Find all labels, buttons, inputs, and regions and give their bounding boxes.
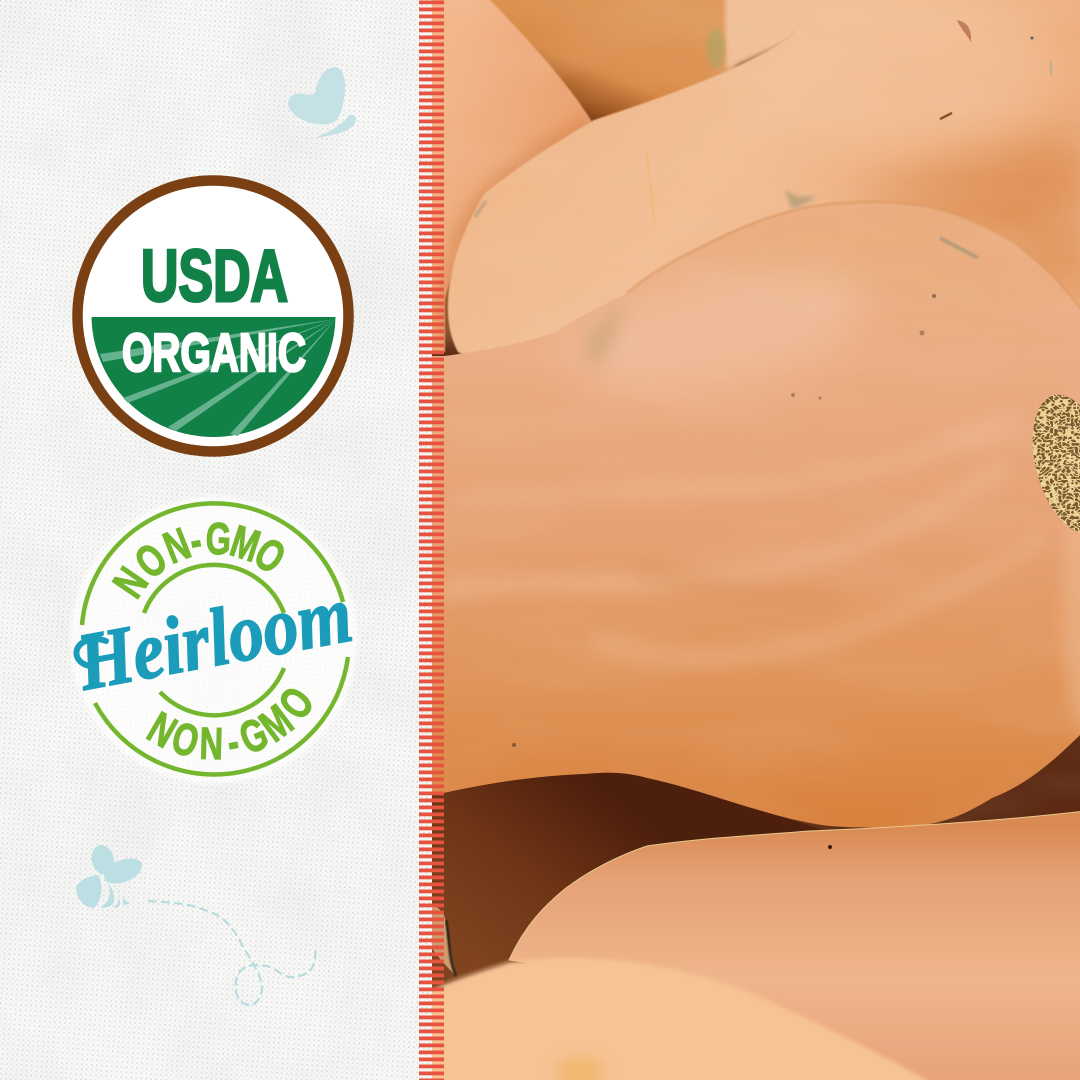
shading: upper right band bbox=[852, 114, 1080, 305]
highlight: right rim of main squash bbox=[1063, 470, 1080, 730]
seal: bottom NON-GMO: O bbox=[166, 713, 204, 768]
photo: butternut squash close-up bbox=[425, 0, 1080, 1080]
seal: top NON-GMO: N bbox=[157, 519, 197, 574]
rim: main squash top edge bbox=[627, 202, 1080, 315]
seal: green ring arcs bbox=[82, 503, 348, 775]
icon: bee with dashed flight path bbox=[76, 843, 315, 1005]
swash of the H bbox=[76, 639, 106, 666]
spot: lower right squash bbox=[828, 845, 832, 849]
seal: Heirloom script: Heirloom bbox=[70, 568, 359, 708]
highlight: upper squash bbox=[734, 22, 1053, 138]
flight path bbox=[148, 901, 315, 1005]
seal: white backing bbox=[70, 496, 358, 784]
badge: Non-GMO Heirloom seal bbox=[70, 496, 359, 784]
seal: ORGANIC text: ORGANIC bbox=[122, 323, 306, 383]
seal: USDA text: USDA bbox=[141, 236, 288, 317]
texture: photo mottling bbox=[432, 0, 1080, 830]
squash: bottom left foreground bbox=[425, 958, 935, 1080]
panel: woven cloth background bbox=[0, 0, 432, 1080]
icon: squash stem scar bbox=[1032, 394, 1080, 532]
seal: bottom NON-GMO bbox=[139, 679, 324, 770]
seal: top NON-GMO: N bbox=[104, 560, 158, 607]
highlight: main squash pink sheen bbox=[578, 260, 864, 402]
seal: bottom NON-GMO: G bbox=[233, 709, 275, 764]
seal: top NON-GMO: O bbox=[245, 529, 294, 584]
blemish: upper squash bbox=[475, 20, 1052, 225]
seal: bottom NON-GMO: M bbox=[251, 696, 302, 752]
seal: top NON-GMO: G bbox=[205, 515, 232, 565]
seal: bottom NON-GMO: O bbox=[270, 679, 324, 729]
bee body and wings bbox=[76, 843, 146, 908]
seal: top NON-GMO: O bbox=[126, 534, 177, 589]
blemish: green smudge between squashes bbox=[707, 28, 725, 68]
ridges: main squash streaks bbox=[442, 453, 1030, 668]
decorative: red vertical stitched stripes bbox=[419, 0, 444, 1080]
squash: main large bbox=[425, 202, 1080, 828]
seal: top NON-GMO: - bbox=[186, 516, 206, 567]
seal: bottom NON-GMO: - bbox=[223, 718, 243, 768]
seal: bottom NON-GMO: N bbox=[199, 720, 224, 770]
squash: top centre, shaded bbox=[488, 0, 738, 120]
blemishes: main squash spots bbox=[512, 238, 978, 747]
seal: bottom NON-GMO: N bbox=[139, 703, 184, 758]
squash: upper large bbox=[447, 0, 1080, 354]
panel: dark gap below main squash bbox=[425, 773, 829, 990]
seal: top NON-GMO bbox=[104, 515, 294, 607]
squash: top left bbox=[425, 0, 592, 352]
shadow: crease under upper squash on the top-left squash bbox=[448, 122, 592, 340]
stem fragment: dark sliver at the left bbox=[432, 905, 456, 976]
squash: lower right bbox=[509, 811, 1080, 1080]
icon: butterfly, top right bbox=[288, 67, 356, 138]
seal: top NON-GMO: M bbox=[225, 517, 265, 572]
seal: brown ring and white centre bbox=[78, 180, 348, 452]
seal: green lower half bbox=[92, 317, 336, 437]
highlight: yellow spot on foreground bbox=[556, 1058, 604, 1080]
squash: top pale neck bbox=[723, 0, 816, 70]
badge: USDA Organic seal bbox=[78, 180, 348, 452]
